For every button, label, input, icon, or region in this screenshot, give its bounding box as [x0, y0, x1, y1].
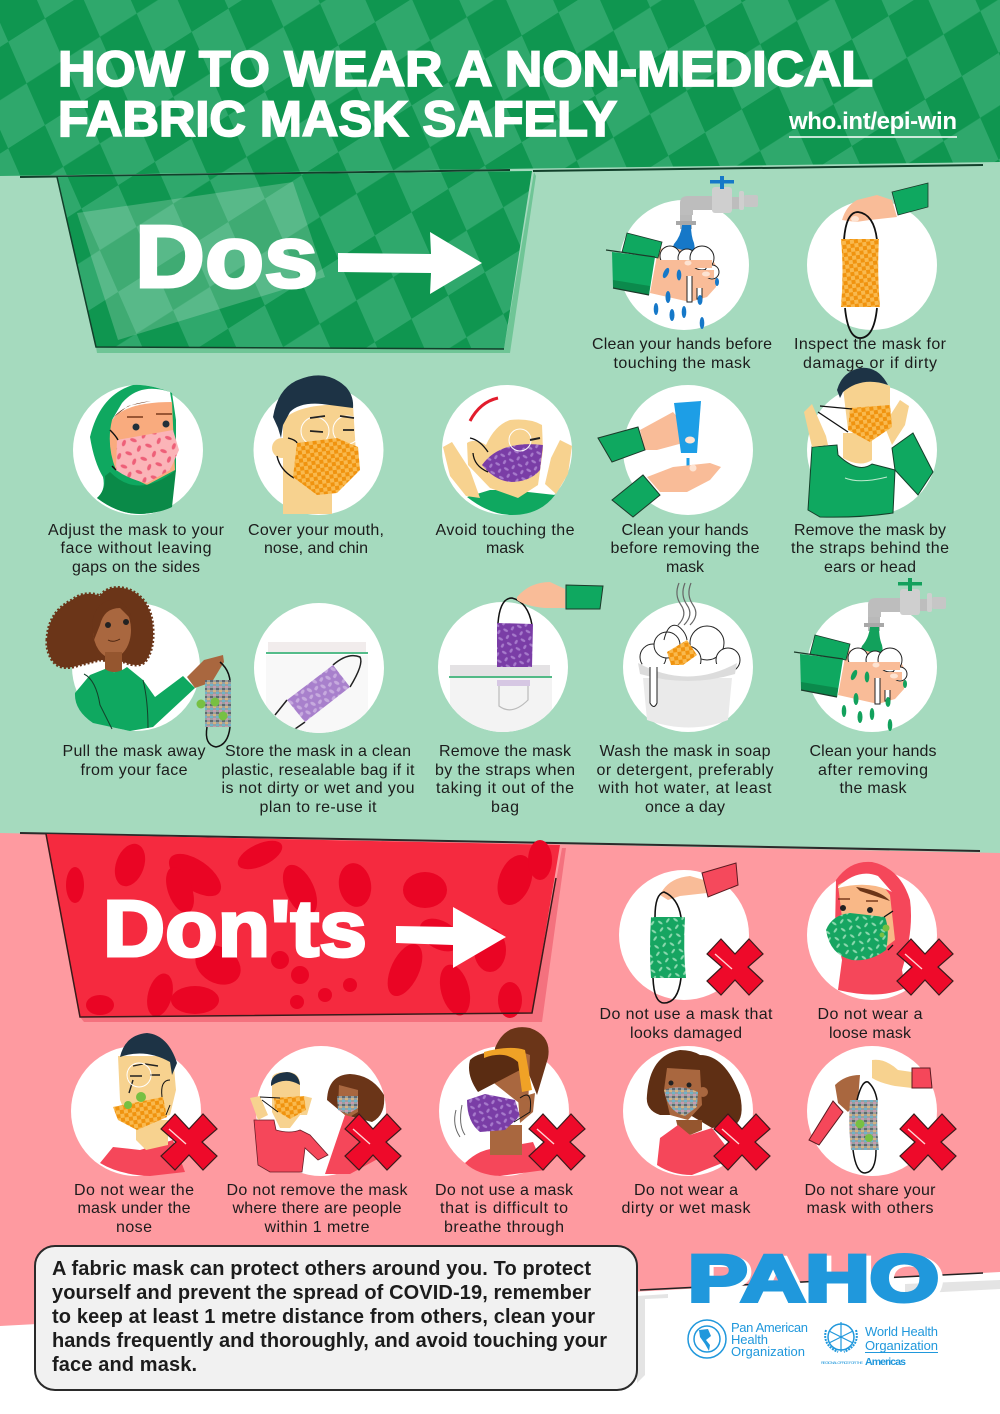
callout: COVID-19 reminder [35, 1246, 637, 1390]
caption: gaps on the sides [72, 559, 200, 576]
caption: Do not use a mask that [600, 1006, 773, 1023]
caption: taking it out of the [436, 780, 574, 797]
caption: where there are people [232, 1200, 402, 1217]
caption: within 1 metre [264, 1219, 370, 1236]
caption: touching the mask [614, 355, 752, 372]
header band [0, 0, 1000, 176]
cross [529, 1114, 585, 1170]
logo: WHO Regional Office for the Americas: Organization [865, 1338, 938, 1353]
don't: remove mask near people [226, 1046, 408, 1236]
banner: Dos [57, 171, 536, 353]
icon: woman in red hijab with loose green mask [826, 862, 911, 995]
caption: Remove the mask [439, 743, 572, 760]
step: cover mouth, nose, chin [248, 375, 384, 557]
icon: hand holding damaged green mask [650, 863, 738, 1003]
caption: Do not wear the [74, 1182, 194, 1199]
caption: Do not wear a [634, 1182, 738, 1199]
callout text: hands frequently and thoroughly, and avoid touching your [52, 1330, 607, 1352]
icon: man with mask under nose [100, 1033, 185, 1176]
caption: breathe through [444, 1219, 564, 1236]
caption: Pull the mask away [62, 743, 206, 760]
caption: ears or head [824, 559, 916, 576]
caption: Do not use a mask [435, 1182, 574, 1199]
logo: WHO Regional Office for the Americas: REGIONAL OFFICE FOR THE [821, 1360, 863, 1365]
caption: plastic, resealable bag if it [222, 762, 415, 779]
icon: two hands passing a mask [809, 1060, 932, 1173]
caption: the straps behind the [791, 540, 949, 557]
caption: Clean your hands [622, 522, 748, 539]
caption: dirty or wet mask [622, 1200, 752, 1217]
caption: nose [116, 1219, 152, 1236]
cross [161, 1114, 217, 1170]
banner: Don'ts [46, 834, 566, 1022]
caption: or detergent, preferably [596, 762, 774, 779]
caption: Adjust the mask to your [48, 522, 225, 539]
icon: hand lifting purple mask from bag [449, 582, 603, 736]
flower pattern [66, 835, 552, 1019]
icon: man removing orange mask [804, 368, 933, 517]
panel: Dos green section [0, 160, 1000, 862]
arrow: Dos [338, 232, 482, 294]
logo: Pan American Health Organization: Pan American [731, 1320, 808, 1335]
icon: washing hands with blue water [606, 176, 758, 329]
step: remove mask from bag [435, 582, 603, 816]
step: avoid touching the mask [436, 385, 575, 557]
step: pull the mask away [47, 588, 231, 779]
logo: Pan American Health Organization: Health [731, 1332, 768, 1347]
caption: nose, and chin [264, 540, 368, 557]
step: inspect the mask [794, 183, 947, 372]
icon: older woman, purple mask, raised hands [443, 398, 572, 515]
don't: share mask [804, 1046, 956, 1217]
Dos heading: Dos [135, 207, 318, 306]
caption: Wash the mask in soap [600, 743, 771, 760]
caption: Do not remove the mask [226, 1182, 408, 1199]
caption: bag [491, 799, 519, 816]
cross [897, 939, 953, 995]
don't: mask under the nose [71, 1033, 217, 1236]
logo: WHO Regional Office for the Americas [821, 1322, 938, 1368]
caption: Do not wear a [818, 1006, 923, 1023]
logo: WHO Regional Office for the Americas: World Health [865, 1324, 938, 1339]
caption: with hot water, at least [598, 780, 772, 797]
don't: dirty or wet mask [622, 1046, 770, 1217]
step: remove mask by straps [791, 368, 949, 576]
icon: curly-haired woman holding grey mask [47, 588, 231, 747]
logo: PAHO wordmark: PAHO [688, 1241, 939, 1315]
panel: Don'ts pink section [0, 833, 1000, 1326]
caption: face without leaving [60, 540, 212, 557]
caption: Remove the mask by [794, 522, 946, 539]
title [58, 41, 873, 147]
icon: pot with soap foam and mask [638, 583, 740, 728]
cross [345, 1114, 401, 1170]
title: FABRIC MASK SAFELY [58, 91, 617, 147]
don't: mask difficult to breathe [435, 1027, 585, 1236]
logo: Pan American Health Organization [688, 1320, 808, 1359]
logo: PAHO wordmark: PAHO [692, 1243, 944, 1317]
caption: mask under the [78, 1200, 191, 1217]
title: HOW TO WEAR A NON-MEDICAL [58, 41, 873, 97]
icon: woman with dirty mask [647, 1050, 742, 1175]
caption: Do not share your [804, 1182, 936, 1199]
caption: that is difficult to [440, 1200, 568, 1217]
caption: mask [486, 540, 525, 557]
don't: damaged mask [600, 863, 773, 1042]
arrow: Don'ts [396, 907, 506, 968]
Don'ts heading: Don'ts [103, 884, 367, 973]
don't: loose mask [807, 862, 953, 1042]
caption: mask [666, 559, 705, 576]
caption: after removing [818, 762, 928, 779]
caption: once a day [645, 799, 725, 816]
step: wash the mask [596, 583, 774, 816]
caption: mask with others [806, 1200, 934, 1217]
caption: from your face [80, 762, 188, 779]
caption: before removing the [610, 540, 760, 557]
circle: handwash [619, 200, 749, 330]
icon: hand holding orange mask [841, 183, 928, 338]
step: clean hands before touching [592, 176, 772, 372]
logo: WHO Regional Office for the Americas: Americas [865, 1356, 906, 1368]
caption: Cover your mouth, [248, 522, 384, 539]
callout text: A fabric mask can protect others around you. To protect [52, 1258, 591, 1280]
caption: looks damaged [630, 1025, 742, 1042]
caption: loose mask [829, 1025, 912, 1042]
website link: who.int/epi-win [788, 108, 957, 135]
icon: man removing mask next to woman [250, 1072, 385, 1174]
callout text: face and mask. [52, 1354, 197, 1376]
icon: woman struggling to breathe [455, 1027, 549, 1176]
caption: Store the mask in a clean [225, 743, 411, 760]
caption: Inspect the mask for [794, 336, 947, 353]
logo: Pan American Health Organization: Organization [731, 1344, 805, 1359]
step: clean hands after removing [794, 578, 946, 797]
step: clean hands before removing [598, 385, 760, 576]
icon: hands and blue sanitizer tube [598, 401, 721, 517]
caption: Avoid touching the [436, 522, 575, 539]
cross [900, 1114, 956, 1170]
cross [714, 1114, 770, 1170]
caption: by the straps when [435, 762, 575, 779]
caption: the mask [840, 780, 908, 797]
caption: plan to re-use it [260, 799, 377, 816]
callout text: yourself and prevent the spread of COVID-19, remember [52, 1282, 591, 1304]
icon: purple mask in plastic bag [266, 642, 368, 735]
step: store in resealable bag [222, 603, 415, 816]
caption: Clean your hands [810, 743, 936, 760]
caption: Clean your hands before [592, 336, 772, 353]
icon: man with orange checked mask [272, 375, 361, 514]
caption: is not dirty or wet and you [222, 780, 414, 797]
step: adjust the mask [48, 385, 225, 576]
caption: damage or if dirty [803, 355, 937, 372]
cross [707, 939, 763, 995]
icon: washing hands with green water [794, 578, 946, 731]
callout text: to keep at least 1 metre distance from others, clean your [52, 1306, 595, 1328]
icon: woman in green hijab with pink mask [90, 385, 179, 514]
